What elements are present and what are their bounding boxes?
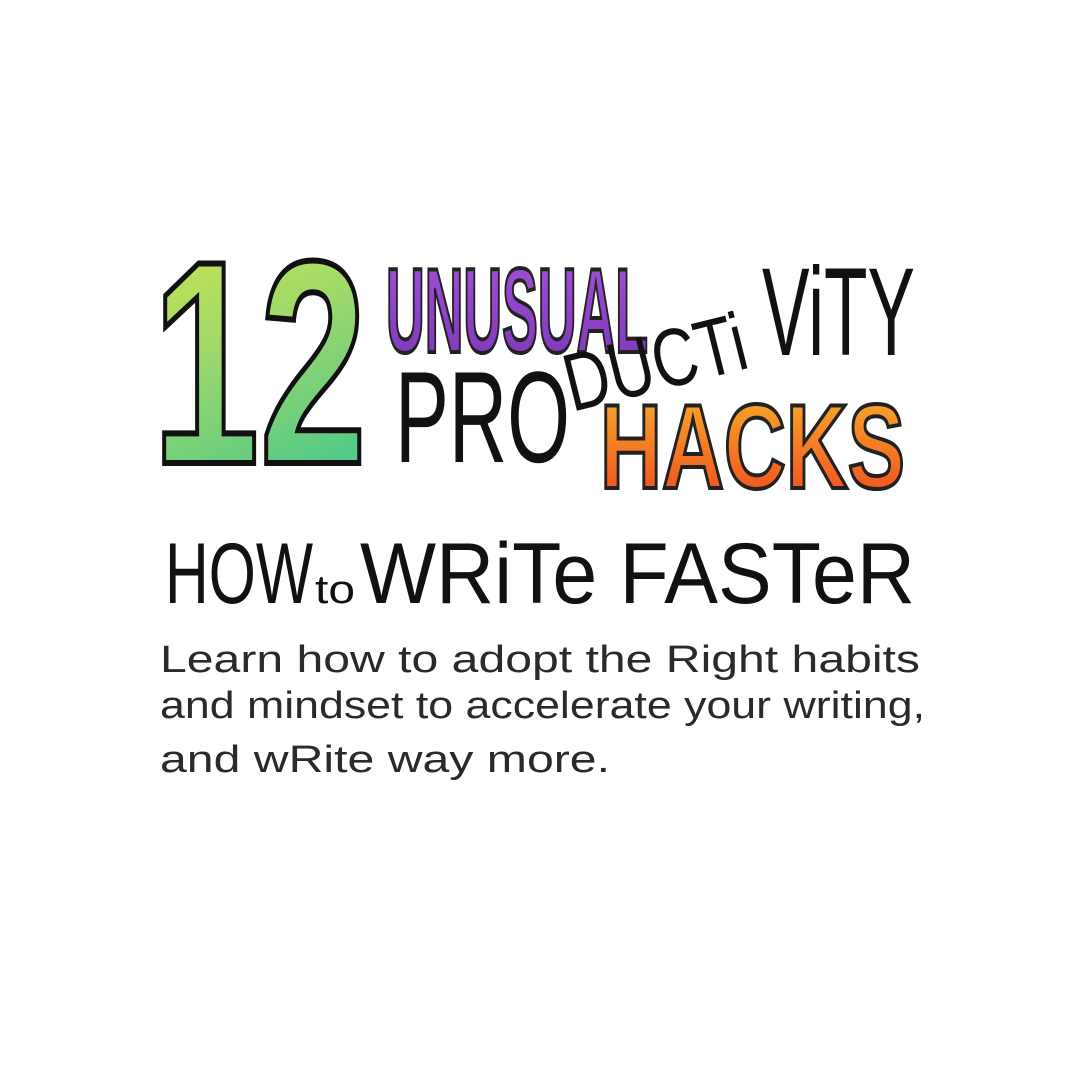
subtitle: How to write faster: to: [315, 568, 355, 612]
title word: PRODUCTIVITY: PRO: [395, 344, 570, 490]
title word: PRODUCTIVITY: DUCTi: [554, 296, 756, 429]
body text: description: and mindset to accelerate your writing,: [160, 685, 925, 727]
body text: description: and wRite way more.: [160, 739, 610, 781]
title number: 12: 12: [152, 201, 367, 525]
title word: PRODUCTIVITY: [395, 243, 915, 490]
title word: PRODUCTIVITY: ViTY: [762, 243, 915, 382]
subtitle: How to write faster: WRiTe FASTeR: [360, 526, 915, 622]
title word: HACKS: HACKS: [600, 380, 905, 514]
infographic canvas: UNUSUAL: [386, 244, 648, 378]
body text: description: Learn how to adopt the Right habits: [160, 639, 920, 681]
body text: description: [160, 639, 925, 781]
subtitle: How to write faster: HOW: [165, 526, 313, 622]
